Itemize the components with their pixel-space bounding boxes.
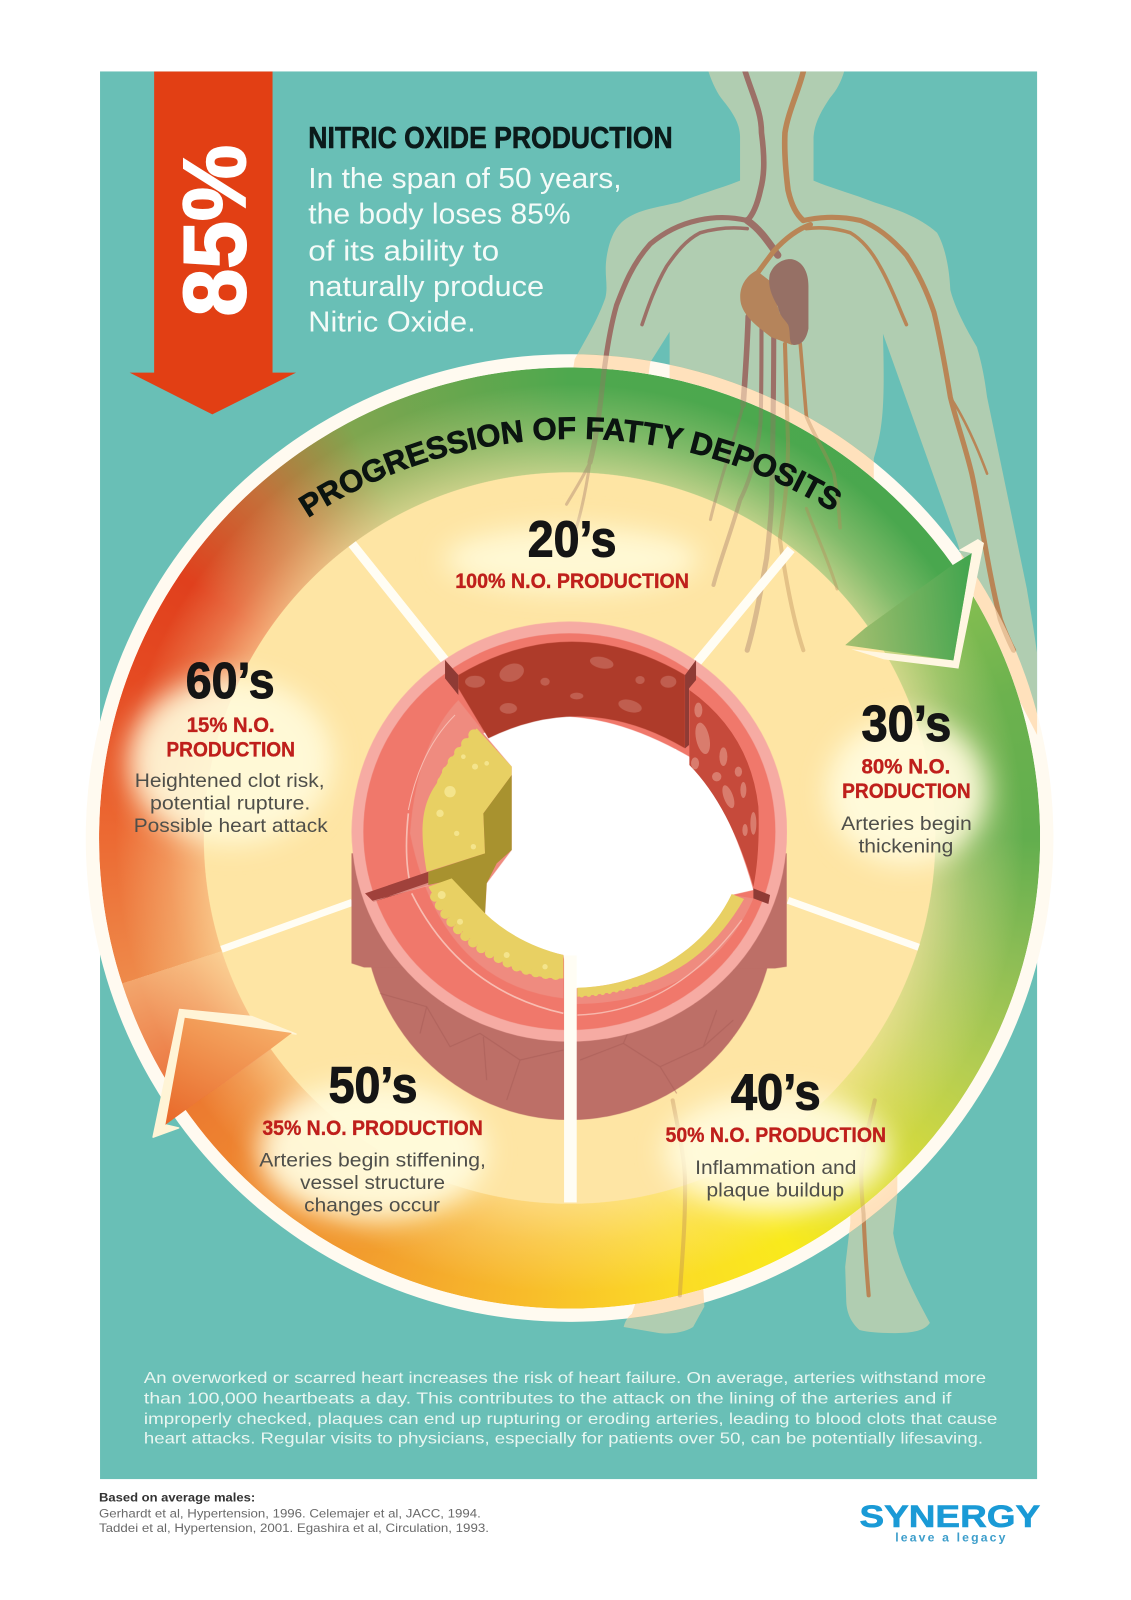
logo: Synergy: leave a legacy	[895, 1530, 1006, 1544]
bottom paragraph: heart attacks. Regular visits to physicians, especially for patients over 50, can be potentially lifesaving.	[144, 1430, 983, 1447]
label: 60s: Possible heart attack	[134, 815, 328, 837]
references: Based on average males:	[99, 1492, 255, 1505]
label: 60s: PRODUCTION	[166, 737, 295, 761]
label: 20s	[455, 510, 689, 593]
intro text: naturally produce	[308, 271, 544, 303]
label: 20s: 100% N.O. PRODUCTION	[455, 569, 689, 593]
logo: Synergy	[859, 1498, 1040, 1544]
intro text: of its ability to	[308, 235, 499, 267]
foreground layer: arrows, vessel and labels	[109, 356, 1016, 1298]
label: 50s: changes occur	[304, 1195, 441, 1217]
human body silhouette	[531, 71, 1037, 1333]
references: Gerhardt et al, Hypertension, 1996. Celemajer et al, JACC, 1994.	[99, 1507, 481, 1520]
label: 60s	[134, 652, 328, 837]
intro text: Nitric Oxide.	[308, 307, 476, 339]
segment: 40s wall and plaque	[577, 888, 770, 1015]
artery cross-section	[352, 622, 787, 1120]
arrowhead: green	[845, 539, 984, 669]
label: 50s: 35% N.O. PRODUCTION	[262, 1116, 483, 1140]
intro text	[308, 163, 622, 339]
segment: 30s wall	[689, 690, 759, 887]
label: 50s	[259, 1056, 486, 1217]
label: 50s: vessel structure	[300, 1172, 445, 1194]
label: 40s: 40’s	[731, 1064, 821, 1121]
label: 40s: Inflammation and	[695, 1157, 856, 1179]
arrowhead: orange	[153, 1010, 296, 1137]
background layer: panel, body and header	[86, 71, 1054, 1544]
label: 50s: 50’s	[329, 1056, 417, 1113]
cut face: upper right	[685, 660, 696, 748]
label: 60s: Heightened clot risk,	[135, 770, 325, 792]
wall lines	[406, 715, 563, 1013]
segment: 20s wall	[458, 642, 685, 748]
teal panel	[100, 71, 1037, 1479]
label: 30s: Arteries begin	[841, 813, 972, 835]
cut face: upper left	[445, 660, 458, 695]
label: 30s: 30’s	[862, 695, 951, 752]
logo: Synergy: SYNERGY	[859, 1498, 1040, 1534]
label: 30s: PRODUCTION	[842, 779, 971, 803]
artery outer wall	[352, 700, 787, 1120]
intro text: the body loses 85%	[308, 199, 571, 231]
label: 40s: plaque buildup	[706, 1179, 844, 1201]
cut between 60s and 50s	[365, 872, 428, 903]
label: 30s: thickening	[858, 835, 953, 857]
plaque: 60s	[423, 728, 512, 872]
artery wall	[363, 633, 775, 1030]
references: Taddei et al, Hypertension, 2001. Egashira et al, Circulation, 1993.	[99, 1522, 489, 1535]
body tint seen through white rim	[574, 354, 1038, 1318]
label: 60s: 15% N.O.	[187, 713, 275, 737]
lumen	[483, 716, 753, 988]
label: 40s: 50% N.O. PRODUCTION	[666, 1123, 886, 1147]
intro text: In the span of 50 years,	[308, 163, 622, 195]
label: 30s	[841, 695, 972, 857]
artery rim	[352, 622, 787, 1042]
inner beige disc	[202, 471, 937, 1206]
label: 60s: potential rupture.	[150, 792, 310, 814]
label: 40s	[666, 1064, 886, 1201]
plaque: 50s	[428, 878, 563, 978]
references	[99, 1492, 489, 1535]
heading: NITRIC OXIDE PRODUCTION	[308, 121, 673, 155]
label: 30s: 80% N.O.	[862, 755, 950, 779]
bottom paragraph: An overworked or scarred heart increases the risk of heart failure. On average, arteries withstand more	[144, 1370, 986, 1387]
blood vessels and heart	[567, 71, 1014, 1295]
spokes	[222, 544, 919, 949]
veins showing through ring	[565, 356, 1016, 1298]
plaque: olive cut face	[428, 775, 512, 913]
bottom paragraph	[144, 1370, 997, 1447]
label: 60s: 60’s	[186, 652, 275, 709]
red 85% arrow	[130, 71, 296, 414]
label: 50s: Arteries begin stiffening,	[259, 1150, 486, 1172]
label: 20s: 20’s	[528, 510, 617, 567]
circle backing ring	[86, 354, 1053, 1322]
soft text halos	[129, 527, 986, 1221]
red 85% arrow: 85%	[166, 145, 264, 316]
vertical spoke	[564, 955, 577, 1202]
segment: 60s and 50s wall	[410, 700, 563, 998]
curved title: PROGRESSION OF FATTY DEPOSITS	[298, 416, 841, 518]
gradient progress ring	[99, 367, 1040, 1309]
bottom paragraph: than 100,000 heartbeats a day. This contributes to the attack on the lining of the arteries and if	[144, 1391, 952, 1408]
icon: heart	[740, 259, 808, 345]
bottom paragraph: improperly checked, plaques can end up rupturing or eroding arteries, leading to blood clots that cause	[144, 1411, 997, 1428]
